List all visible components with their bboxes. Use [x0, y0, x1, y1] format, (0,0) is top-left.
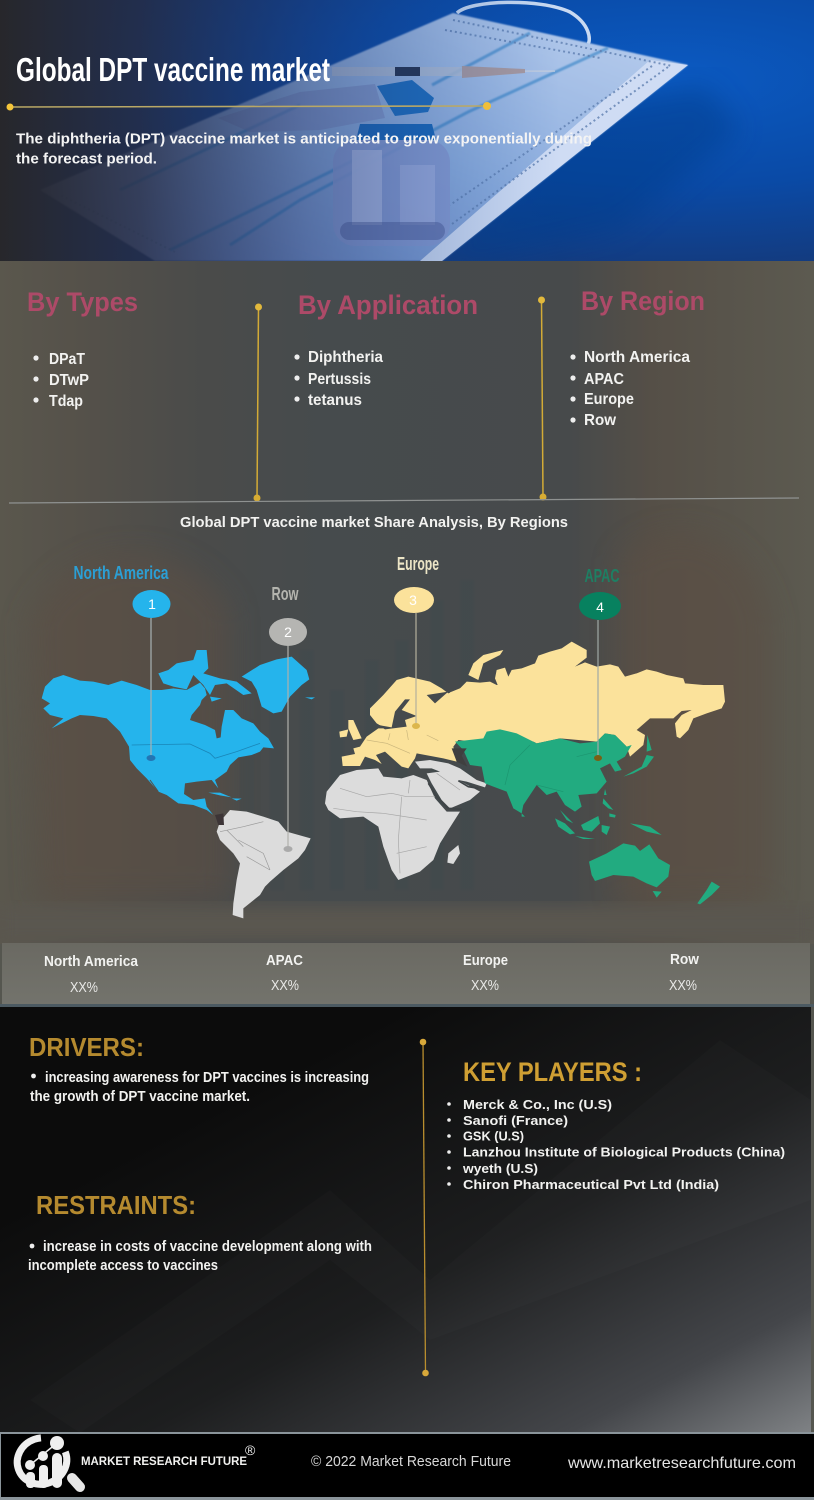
panel: drivers, restraints, key players: [0, 1007, 814, 1433]
copyright: © 2022 Market Research Future: [311, 1453, 511, 1470]
callout: Europe pin: [394, 554, 439, 729]
divider: application / region: [538, 296, 546, 500]
column: Row: [669, 952, 700, 994]
heading: By Types: [27, 287, 138, 317]
column: APAC: [266, 953, 303, 994]
callout: APAC pin: [579, 566, 621, 761]
column: North America: [44, 954, 139, 996]
registered mark: ®: [245, 1442, 256, 1458]
panel: segmentation and map background: [0, 261, 814, 944]
restraints text: increase in costs of vaccine development along with: [43, 1239, 372, 1255]
callout: North America pin: 1: [148, 596, 156, 612]
list: tetanus: [308, 392, 362, 409]
callout: APAC pin: APAC: [584, 566, 620, 586]
key players list: Merck & Co., Inc (U.S): [463, 1097, 612, 1112]
region: South America: [215, 810, 311, 918]
brand name: MARKET RESEARCH FUTURE: [81, 1454, 247, 1468]
panel: header banner: [0, 0, 814, 262]
column: Europe: [463, 953, 508, 994]
column: North America: North America: [44, 954, 139, 970]
panel: By Types: [27, 287, 138, 410]
column: Europe: Europe: [463, 953, 508, 969]
panel: footer: [0, 1431, 814, 1500]
vertical divider: [420, 1039, 429, 1376]
column: APAC: XX%: [271, 978, 299, 994]
restraints heading: RESTRAINTS:: [36, 1190, 196, 1220]
list: Tdap: [49, 393, 83, 410]
drivers text: the growth of DPT vaccine market.: [30, 1089, 250, 1105]
key players list: [447, 1097, 785, 1192]
list: Row: [584, 412, 617, 429]
callout: Row pin: Row: [272, 584, 299, 604]
callout: Europe pin: 3: [409, 592, 417, 608]
list: DTwP: [49, 372, 89, 389]
map heading: Global DPT vaccine market Share Analysis, By Regions: [180, 514, 568, 531]
callout: Row pin: [269, 584, 307, 852]
column: Row: Row: [670, 952, 700, 968]
panel: regional share table: [0, 943, 814, 1007]
callout: APAC pin: 4: [596, 599, 604, 615]
region: North America: [42, 650, 315, 815]
heading: By Application: [298, 290, 478, 320]
logo icon: [11, 1431, 80, 1491]
region: Asia Pacific: [452, 729, 720, 904]
divider: types / application: [254, 304, 262, 502]
key players list: wyeth (U.S): [462, 1161, 538, 1176]
column: Row: XX%: [669, 978, 697, 994]
column: North America: XX%: [70, 980, 98, 996]
website: www.marketresearchfuture.com: [567, 1455, 796, 1472]
intro text: the forecast period.: [16, 150, 157, 168]
callout: Row pin: 2: [284, 624, 292, 640]
region: Europe and Russia: [339, 642, 725, 768]
list: [570, 349, 690, 429]
key players heading: KEY PLAYERS :: [463, 1057, 642, 1087]
panel: By Region: [570, 286, 705, 429]
drivers text: increasing awareness for DPT vaccines is increasing: [45, 1070, 369, 1086]
intro text: [16, 130, 592, 168]
heading: By Region: [581, 286, 705, 316]
region: Africa and Middle East: [325, 760, 487, 880]
column: APAC: APAC: [266, 953, 303, 969]
callout: North America pin: [74, 563, 170, 761]
image: surgical mask and vials: [40, 2, 740, 262]
divider line with dots: [6, 102, 491, 110]
restraints text: incomplete access to vaccines: [28, 1258, 218, 1274]
list: DPaT: [49, 351, 85, 368]
list: APAC: [584, 371, 624, 388]
list: Pertussis: [308, 371, 371, 388]
list: [33, 351, 89, 410]
list: Diphtheria: [308, 349, 383, 366]
restraints text: [28, 1239, 372, 1274]
callout: Europe pin: Europe: [397, 554, 439, 574]
key players list: Sanofi (France): [463, 1113, 568, 1128]
world map: [42, 642, 725, 918]
title: Global DPT vaccine market: [16, 51, 330, 88]
callout: North America pin: North America: [74, 563, 169, 583]
key players list: Chiron Pharmaceutical Pvt Ltd (India): [463, 1177, 719, 1192]
list: North America: [584, 349, 690, 366]
list: Europe: [584, 391, 634, 408]
panel: By Application: [294, 290, 478, 409]
key players list: GSK (U.S): [463, 1128, 524, 1144]
intro text: The diphtheria (DPT) vaccine market is anticipated to grow exponentially during: [16, 130, 592, 148]
list: [294, 349, 383, 409]
column: Europe: XX%: [471, 978, 499, 994]
drivers text: [30, 1070, 369, 1105]
drivers heading: DRIVERS:: [29, 1032, 144, 1062]
key players list: Lanzhou Institute of Biological Products (China): [463, 1144, 785, 1160]
